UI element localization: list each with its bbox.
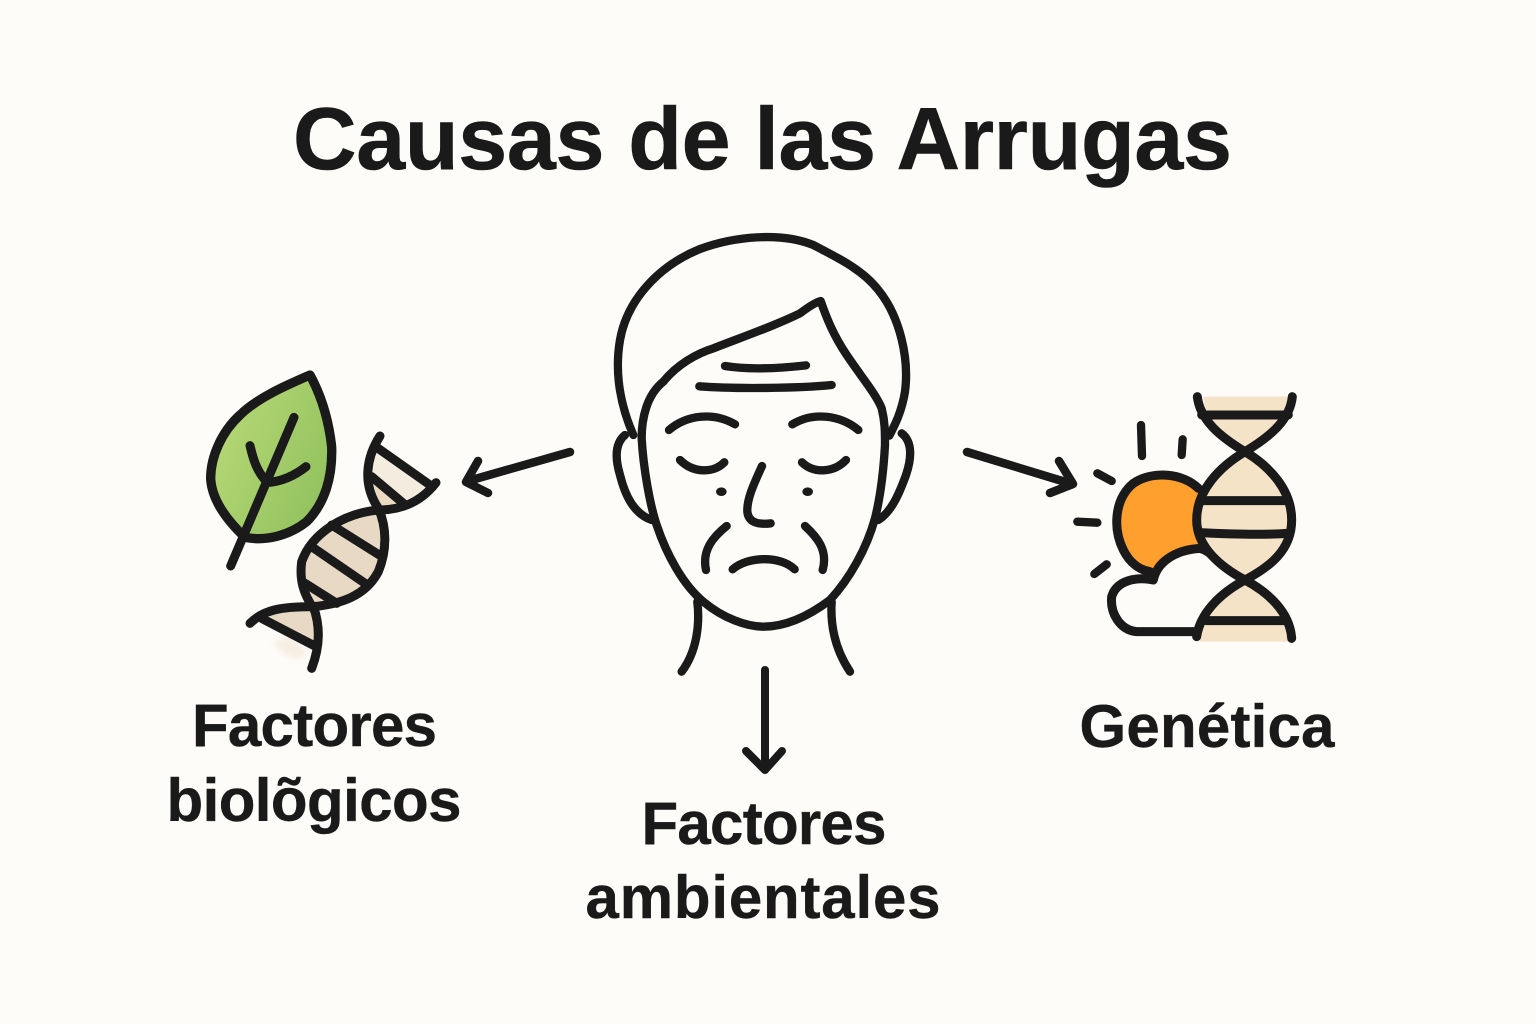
left ear [617, 435, 652, 520]
hair outline [618, 237, 906, 436]
icon: leaf and DNA [211, 375, 436, 668]
sun rays [1077, 425, 1183, 574]
arrow: to genetics [967, 452, 1073, 493]
forehead wrinkles [699, 365, 832, 388]
under-eye marks [716, 487, 813, 496]
eyebrows [669, 417, 858, 430]
label: environmental factors: ambientales [586, 864, 940, 931]
left neck line [682, 602, 698, 672]
sun [1117, 475, 1200, 572]
label: genetics: Genética [1080, 693, 1335, 760]
arrow: to environmental factors [746, 670, 782, 770]
cloud [1111, 548, 1215, 632]
icon: wrinkled face [617, 237, 910, 672]
right neck line [831, 602, 850, 672]
right ear [878, 433, 910, 520]
nose [747, 466, 771, 524]
DNA helix [1197, 397, 1292, 642]
label: biological factors [166, 692, 462, 834]
nasolabial folds [705, 526, 824, 570]
icon: sun, cloud and DNA [1077, 397, 1292, 642]
leaf [211, 375, 332, 566]
closed eyes [680, 460, 846, 470]
title: Causas de las Arrugas [293, 89, 1232, 188]
mouth [733, 559, 795, 569]
label: environmental factors: Factores [642, 790, 886, 857]
label: environmental factors [586, 790, 940, 931]
arrow: to biological factors [466, 452, 570, 493]
label: biological factors: biolõgicos [166, 767, 462, 834]
label: biological factors: Factores [192, 692, 437, 759]
face outline and hairline [642, 301, 885, 627]
DNA helix [250, 436, 436, 668]
